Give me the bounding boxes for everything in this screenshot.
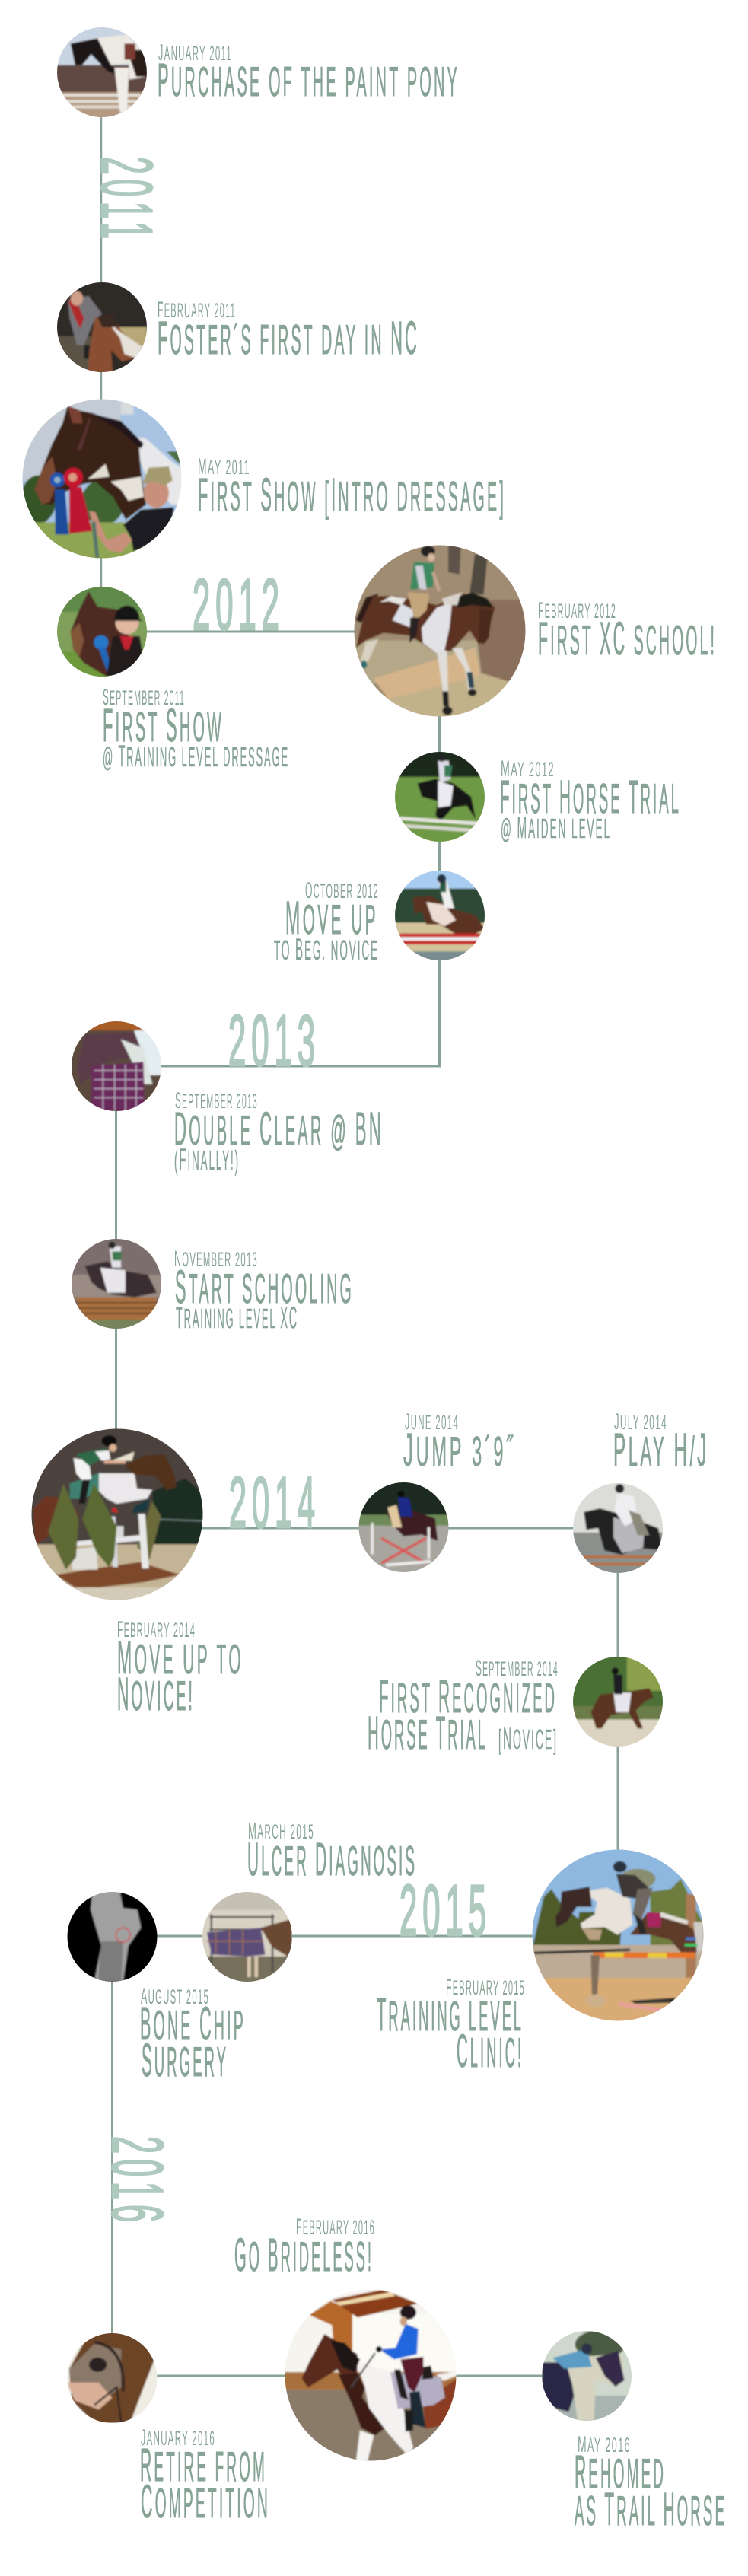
event: May 2011 [19, 396, 506, 563]
photo: ulcer diagnosis [201, 1890, 294, 1983]
timeline infographic: RETIRE FROM [140, 2439, 267, 2491]
event: September 2011 [56, 585, 289, 773]
event: February 2012 [351, 542, 717, 721]
event: February 2011 [56, 281, 419, 374]
event: September 2014: SEPTEMBER 2014 [476, 1656, 559, 1681]
timeline infographic: COMPETITION [141, 2476, 270, 2527]
event: September 2014: [NOVICE] [498, 1722, 558, 1756]
event: January 2016: JANUARY 2016 [141, 2425, 215, 2450]
photo: training level clinic [529, 1846, 708, 2025]
event: February 2014 [28, 1425, 243, 1720]
event: August 2015 [65, 1890, 246, 2086]
photo: x-ray of bone chip [65, 1890, 159, 1983]
event: October 2012: TO BEG. NOVICE [274, 933, 379, 966]
event: January 2011: JANUARY 2011 [158, 40, 232, 65]
event: November 2013: NOVEMBER 2013 [174, 1247, 258, 1272]
event: January 2016 [65, 2332, 270, 2527]
timeline infographic: 2012 [193, 565, 285, 645]
timeline infographic: MOVE UP TO [117, 1632, 243, 1683]
photo: rehomed as trail horse [540, 2329, 633, 2422]
timeline infographic: 2013 [228, 1001, 320, 1081]
title: FIRST SHOW [103, 699, 224, 751]
timeline infographic: 2016 [97, 2136, 177, 2227]
connector lines [101, 72, 618, 2376]
date: MAY 2011 [198, 454, 250, 479]
event: January 2011 [56, 26, 460, 119]
photo: start schooling training [70, 1237, 163, 1330]
timeline infographic: 2015 [399, 1871, 492, 1951]
title: DOUBLE CLEAR @ BN [174, 1103, 384, 1154]
photo: move up to beginner novice [393, 869, 486, 962]
event: February 2015: CLINIC! [457, 2025, 524, 2077]
event: November 2013: TRAINING LEVEL XC [176, 1301, 298, 1335]
event: March 2015: MARCH 2015 [248, 1819, 314, 1844]
photo: first recognized horse trial [571, 1655, 664, 1748]
event: September 2011: SEPTEMBER 2011 [103, 685, 185, 710]
event: May 2012: @ MAIDEN LEVEL [501, 811, 611, 845]
photo: riding bridleless [282, 2286, 460, 2465]
title line 2: HORSE TRIAL [368, 1707, 488, 1759]
event: February 2015: FEBRUARY 2015 [446, 1975, 525, 2000]
event: February 2016: FEBRUARY 2016 [296, 2215, 375, 2240]
event: May 2012 [393, 750, 681, 845]
title: PLAY H/J [613, 1424, 709, 1476]
timeline infographic: SURGERY [142, 2034, 228, 2086]
event: February 2016: GO BRIDELESS! [234, 2229, 374, 2281]
date: MAY 2016 [578, 2432, 631, 2457]
photo: Foster's first day in NC [56, 281, 148, 374]
event: November 2013 [70, 1237, 354, 1335]
event: October 2012 [274, 869, 486, 966]
event: February 2014: FEBRUARY 2014 [117, 1617, 196, 1642]
event: March 2015 [201, 1819, 417, 1983]
event: February 2015 [377, 1846, 708, 2077]
event: October 2012: MOVE UP [285, 892, 378, 944]
event: February 2016 [234, 2215, 460, 2465]
title: ULCER DIAGNOSIS [247, 1833, 417, 1885]
photo: play hunter jumper [571, 1482, 664, 1575]
event: May 2016 [540, 2329, 727, 2535]
photo: training level ribbon [56, 585, 148, 678]
event: June 2014 [357, 1409, 515, 1574]
photo: horse nose close-up [65, 2332, 159, 2425]
timeline infographic: START SCHOOLING [175, 1261, 354, 1313]
timeline infographic: JUMP 3´9˝ [403, 1424, 515, 1476]
event: October 2012: OCTOBER 2012 [305, 878, 379, 903]
event: September 2013: SEPTEMBER 2013 [175, 1088, 258, 1113]
photo: first horse trial [393, 750, 486, 843]
event: August 2015: AUGUST 2015 [141, 1984, 209, 2009]
photo: move up to novice [28, 1425, 207, 1604]
photo: purchase of the paint pony [56, 26, 148, 119]
event: February 2012: FEBRUARY 2012 [538, 598, 616, 623]
title: BONE CHIP [140, 1998, 246, 2049]
photo: first show with ribbons [19, 396, 186, 563]
photo: jump 3'9" [357, 1481, 450, 1574]
event: February 2014: NOVICE! [117, 1668, 195, 1720]
timeline infographic: @ TRAINING LEVEL DRESSAGE [103, 740, 289, 773]
date: MAY 2012 [501, 756, 555, 782]
event: February 2011: FEBRUARY 2011 [158, 298, 236, 323]
event: June 2014: JUNE 2014 [405, 1409, 459, 1434]
timeline infographic: 2014 [229, 1463, 320, 1543]
event: September 2013: (FINALLY!) [174, 1143, 240, 1177]
event: September 2014 [368, 1655, 664, 1759]
photo: double clear [70, 1020, 163, 1113]
timeline infographic: 2011 [86, 157, 167, 244]
event: July 2014 [571, 1409, 709, 1575]
photo: first XC school [351, 542, 530, 721]
event: September 2013 [70, 1020, 384, 1177]
event: July 2014: JULY 2014 [614, 1409, 667, 1434]
